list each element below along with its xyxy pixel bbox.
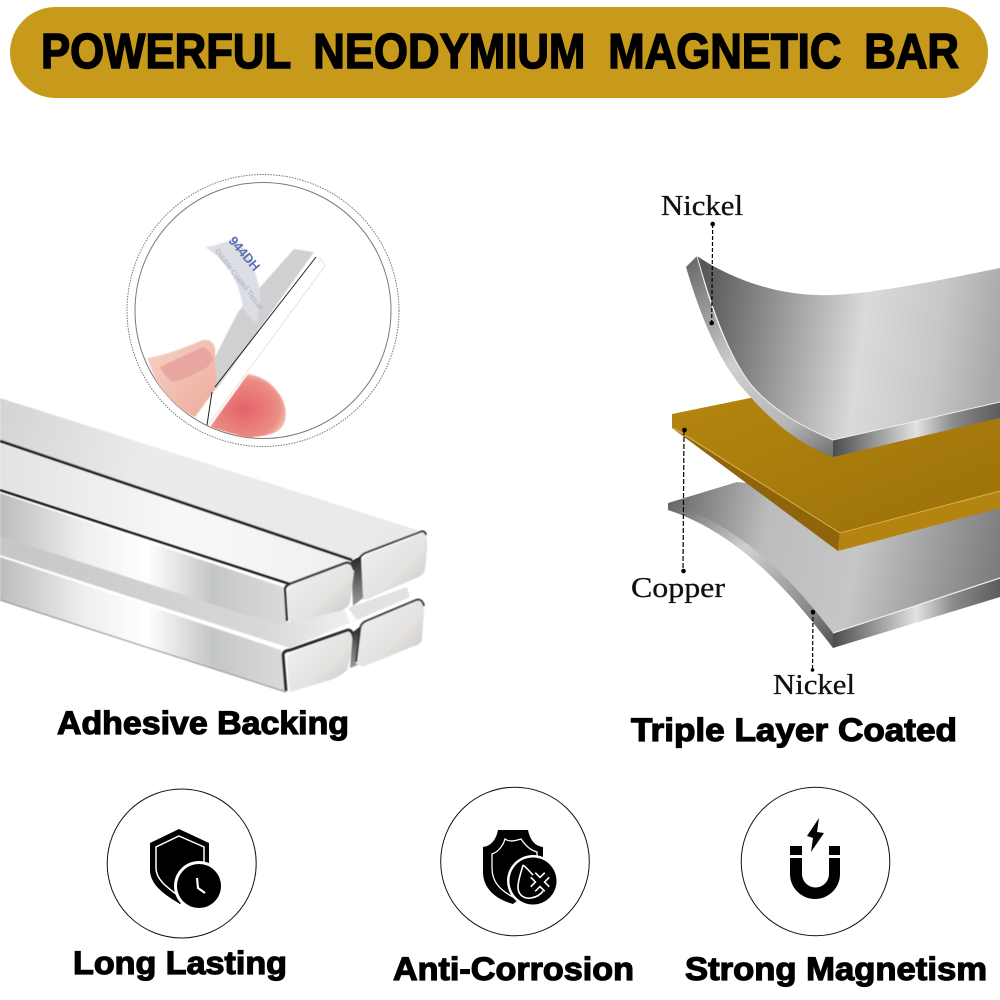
- back top bar: [0, 398, 425, 560]
- callout: copper: [631, 428, 726, 604]
- copper layer: [672, 396, 1000, 551]
- fingertip: [210, 374, 286, 438]
- lower front bar end: [287, 630, 354, 692]
- front top bar end: [287, 561, 354, 623]
- top nickel layer: [686, 256, 1000, 457]
- fingernail: [160, 347, 213, 382]
- diagram: triple layer coating: [631, 191, 1000, 701]
- tape small print: Double Coated Tissue: [213, 247, 265, 311]
- icon: long lasting: [107, 789, 256, 938]
- icon: strong magnetism: [741, 787, 890, 936]
- lower bar shadow edge: [0, 600, 286, 692]
- label: adhesive backing: Adhesive Backing: [57, 705, 349, 741]
- callout: nickel top: [661, 191, 743, 325]
- lower rear bar end: [355, 598, 424, 666]
- lower adhesive strip: [0, 536, 350, 648]
- lower front chrome edge: [283, 630, 354, 691]
- front bar chrome edge: [285, 563, 354, 621]
- magnet face outline: [208, 257, 325, 425]
- back top bar end: [357, 533, 427, 600]
- callout: nickel top: Nickel: [661, 191, 743, 222]
- magnet dark edge: [207, 257, 316, 425]
- magnetic bars stack: [0, 398, 427, 692]
- gap between lower end faces: [350, 625, 362, 668]
- label: anti-corrosion: Anti-Corrosion: [393, 951, 634, 987]
- callout: nickel bottom: [773, 610, 855, 701]
- magnet back with tape: [215, 249, 314, 390]
- back bar chrome edge: [357, 531, 426, 598]
- label: triple layer coated: Triple Layer Coated: [631, 712, 957, 748]
- label: strong magnetism: Strong Magnetism: [685, 951, 987, 987]
- bottom nickel layer: [668, 482, 1000, 648]
- magnet face: [196, 257, 325, 425]
- gap between end faces: [351, 556, 363, 606]
- lower rear chrome edge: [356, 600, 424, 662]
- title banner: [10, 7, 988, 98]
- front top bar side: [0, 493, 287, 625]
- callout: nickel bottom: Nickel: [773, 670, 855, 701]
- lower front bar side: [0, 557, 286, 692]
- gap line: [0, 441, 352, 560]
- thumb: [147, 340, 217, 417]
- label: long lasting: Long Lasting: [73, 945, 287, 981]
- tape print: 944DH: [226, 233, 263, 274]
- rear adhesive strip: [348, 587, 410, 620]
- front top bar upper face: [0, 443, 350, 583]
- panel: adhesive detail circle: [127, 174, 399, 446]
- peeled tape: [205, 239, 260, 323]
- icon: anti-corrosion: [441, 787, 589, 936]
- callout: copper: Copper: [631, 573, 726, 604]
- gap line 2: [0, 490, 290, 584]
